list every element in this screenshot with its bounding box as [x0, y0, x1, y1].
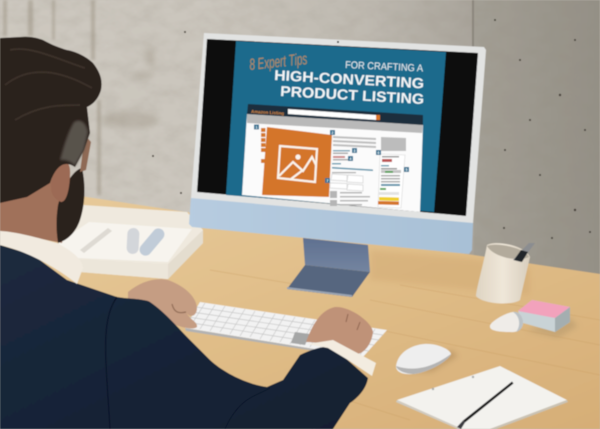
jacket: [0, 245, 368, 429]
listing page mockup: [242, 104, 423, 212]
numbered badges: 3: [354, 149, 356, 153]
numbered badges: [254, 124, 409, 183]
right shirt cuff: [307, 340, 376, 376]
blue chin: [189, 197, 473, 254]
monitor stand: [287, 238, 370, 297]
black screen: [197, 39, 478, 216]
numbered badges: 4: [350, 157, 352, 161]
heading: high-converting: HIGH-CONVERTING: [274, 68, 424, 92]
button: buy now: [378, 201, 399, 205]
keyboard: [185, 302, 387, 358]
shirt collar: [0, 231, 83, 284]
thumbnails: [261, 128, 266, 163]
ear: [51, 162, 70, 202]
left hand on keyboard: [128, 279, 197, 328]
camera: [337, 41, 339, 43]
ad image: [381, 137, 406, 151]
blue slide: [226, 41, 446, 212]
search box: [288, 109, 376, 120]
button: add to cart: [379, 197, 399, 201]
sticky note pad: [518, 300, 578, 338]
heading: product listing: PRODUCT LISTING: [280, 84, 424, 108]
wooden desk: [0, 193, 600, 429]
eraser: [490, 312, 523, 332]
neck: [0, 178, 70, 243]
man: [0, 37, 376, 429]
pen cup: [476, 243, 535, 303]
heading: 8 Expert Tips: 8 Expert Tips: [249, 51, 308, 74]
heading: for crafting a: FOR CRAFTING A: [345, 60, 424, 75]
price and details: [332, 150, 373, 173]
spec table: [330, 191, 370, 206]
option boxes: [330, 174, 363, 191]
silver bezel: [191, 33, 486, 223]
main product image: [262, 127, 332, 197]
greying temple: [60, 120, 88, 166]
buy box: [378, 154, 405, 208]
right hand on keyboard: [306, 307, 373, 354]
numbered badges: 7: [327, 179, 329, 183]
numbered badges: 6: [378, 151, 380, 155]
paper tray with pens: [58, 205, 203, 279]
numbered badges: 2: [332, 131, 334, 135]
concrete wall: [0, 0, 600, 290]
hair: [0, 37, 102, 203]
face edge: [80, 135, 91, 172]
title lines: [333, 136, 376, 148]
icon: picture: [278, 146, 317, 182]
header label: Amazon Listing: [251, 109, 284, 116]
numbered badges: 5: [406, 168, 408, 172]
mouse: [396, 344, 458, 374]
grey band: [247, 114, 423, 133]
white page: [242, 114, 423, 212]
dark header: [247, 104, 423, 125]
notepad with pencil: [396, 366, 568, 429]
monitor: [189, 33, 486, 254]
beard: [56, 168, 84, 243]
numbered badges: 1: [256, 126, 258, 130]
